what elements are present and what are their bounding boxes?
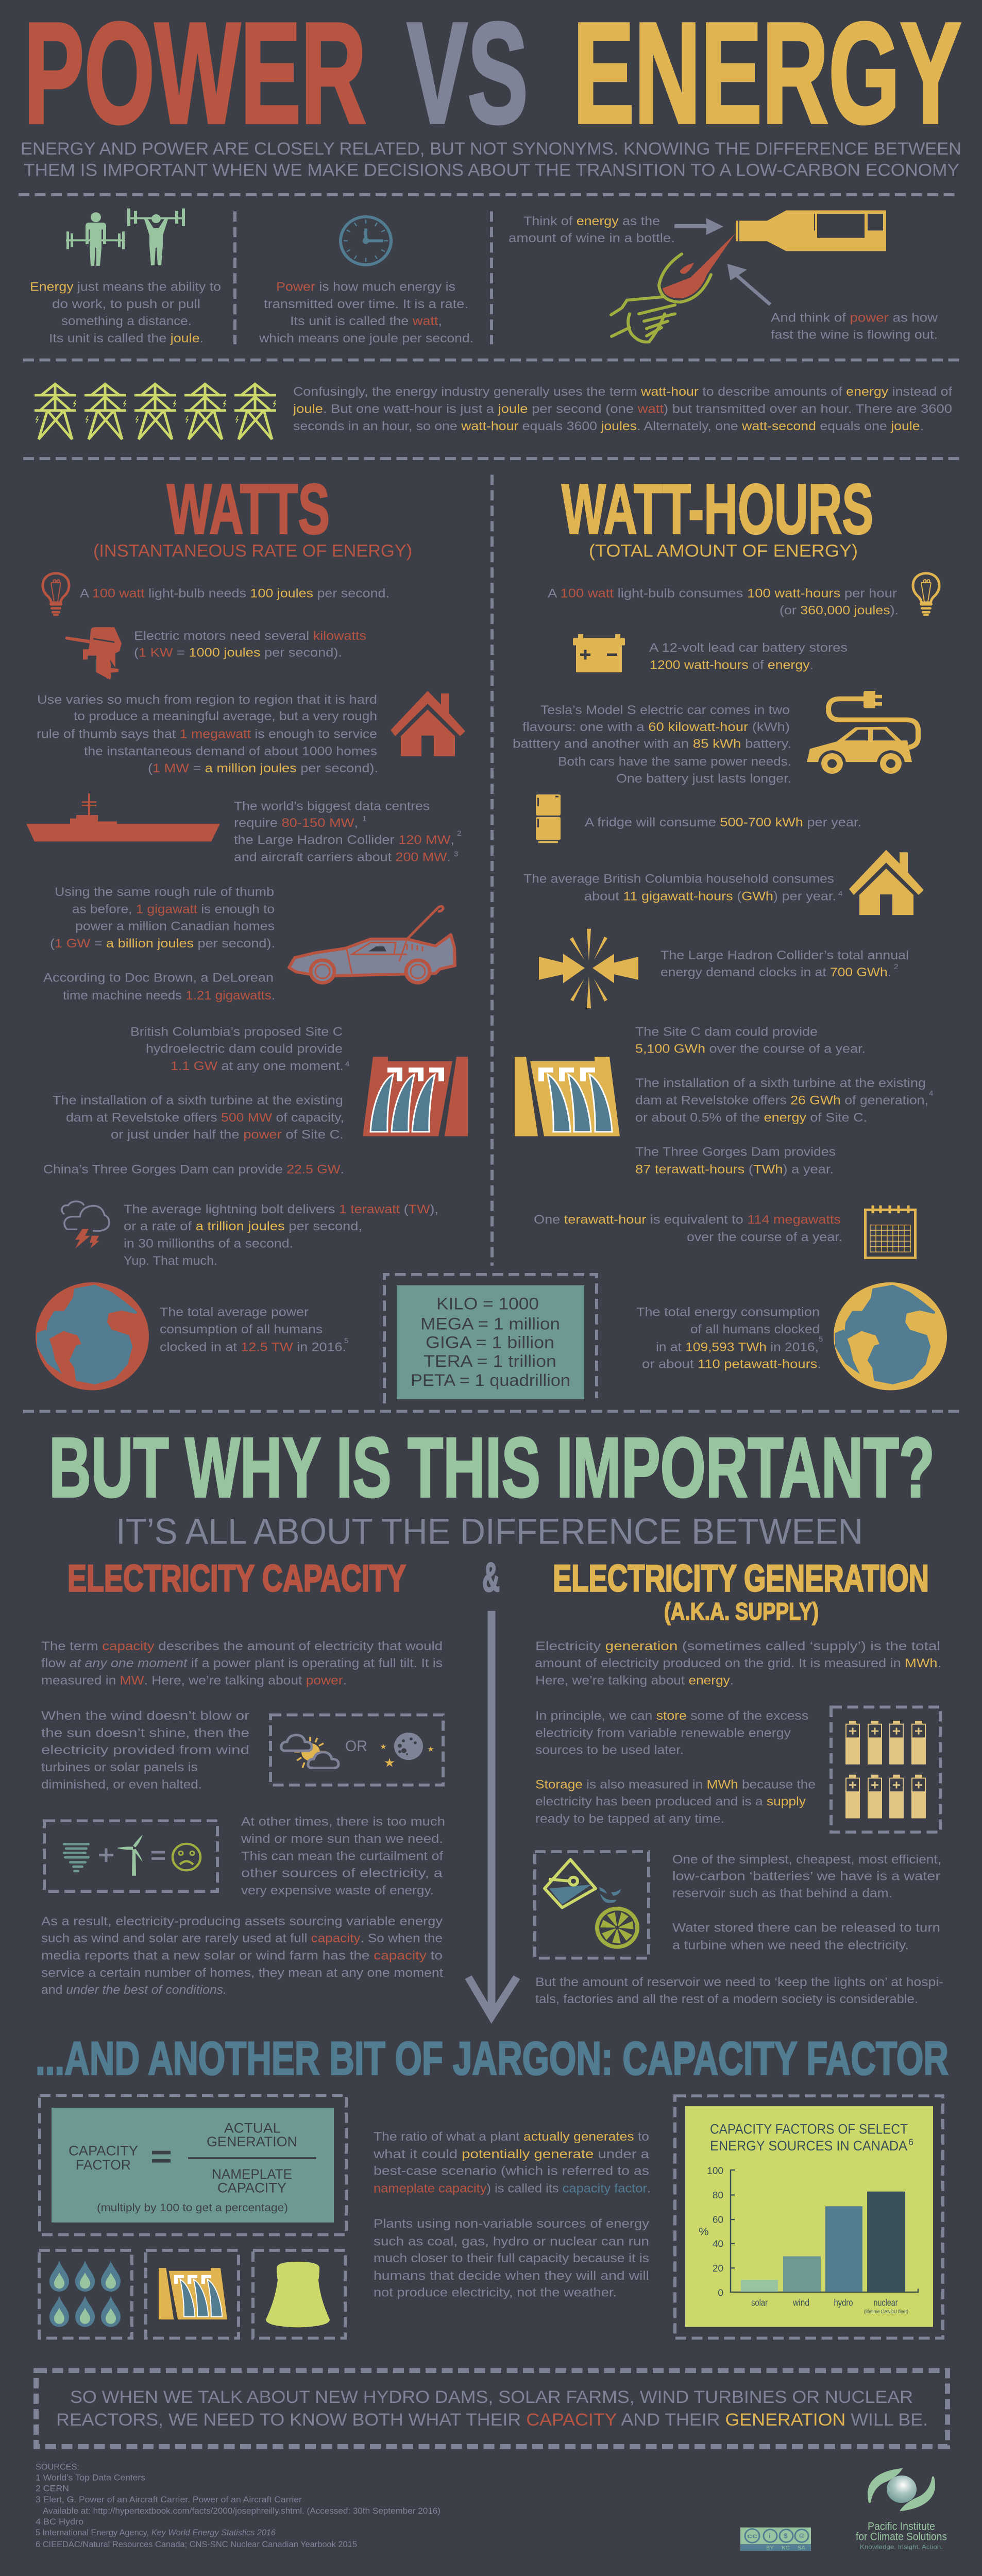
power text: Power is how much energy is [276,280,455,294]
site c text: 87 terawatt-hours (TWh) a year. [635,1163,834,1177]
power text [259,280,473,345]
icon panel: cloudy or night: OR [345,1738,367,1755]
lightning text: or a rate of a trillion joules per second, [124,1220,362,1233]
y axis unit: % [699,2226,709,2238]
human energy text: The total energy consumption [636,1306,820,1319]
collider text [661,948,909,979]
household consumption text: about 11 gigawatt-hours (GWh) per year. [584,890,836,903]
motor text: (1 KW = 1000 joules per second). [134,646,342,659]
variable energy text: media reports that a new solar or wind farm has the capacity to [41,1949,443,1962]
panel: capacity factor formula: NAMEPLATE [212,2166,292,2182]
capacity definition: measured in MW. Here, we’re talking about power. [41,1674,347,1687]
dam text: China’s Three Gorges Dam can provide 22.5 GW. [43,1163,344,1177]
human power text: clocked in at 12.5 TW in 2016. [160,1341,346,1354]
x axis labels: wind [792,2297,809,2308]
icon panel: batteries [831,1707,940,1832]
terawatt-hour text [534,1213,842,1244]
gigawatt text [43,886,275,1003]
icon: fridge [536,794,561,843]
capacity factor text: nameplate capacity) is called its capacity factor. [374,2182,651,2196]
energy text [30,280,221,345]
panel: conclusion: SO WHEN WE TALK ABOUT NEW HYDRO DAMS, SOLAR FARMS, WIND TURBINES OR NUCLEAR [70,2387,913,2407]
site c text: or about 0.5% of the energy of Site C. [635,1111,867,1125]
y axis labels [707,2165,723,2298]
wind and sun text: turbines or solar panels is [41,1761,198,1774]
bulb text: (or 360,000 joules ). [780,604,899,618]
panel: cooling tower [253,2250,345,2338]
panel: watt-hours [513,469,947,1390]
dam text: 4 [345,1060,349,1068]
arrow to bottle [674,218,723,235]
capacity factor text: humans that decide when they will and will [374,2269,649,2283]
storage text: sources to be used later. [535,1743,684,1757]
ampersand: & [482,1555,500,1600]
energy text: Energy just means the ability to [30,280,221,294]
y axis labels: 100 [707,2165,723,2176]
y axis labels: 40 [713,2239,723,2249]
reservoir text: a turbine when we need the electricity. [672,1939,909,1952]
icon: car battery [573,634,625,672]
logo text [856,2520,947,2551]
human energy text: in at 109,593 TWh in 2016, [656,1341,819,1354]
intro text: ENERGY AND POWER ARE CLOSELY RELATED, BUT NOT SYNONYMS. KNOWING THE DIFFERENCE BETWEEN [21,139,961,159]
icon: red bulb [43,573,69,616]
chart axes [731,2170,918,2292]
logo text: for Climate Solutions [856,2531,947,2543]
icon: wine bottle [736,210,886,251]
sources: 3 Elert, G. Power of an Aircraft Carrier. Power of an Aircraft Carrier [36,2495,302,2504]
wine text [509,214,938,342]
dam text: The installation of a sixth turbine at the existing [53,1094,343,1107]
variable energy text: As a result, electricity-producing assets sourcing variable energy [41,1914,443,1928]
creative commons badge: $ [784,2532,788,2540]
y axis labels: 80 [713,2190,723,2200]
x axis labels: (lifetime CANDU fleet) [864,2309,908,2315]
collider text: The Large Hadron Collider’s total annual [661,948,909,962]
data centres text [234,800,461,864]
household consumption text: 4 [838,890,842,898]
power text: transmitted over time. It is a rate. [264,297,468,311]
site c text: 5,100 GWh over the course of a year. [635,1042,866,1056]
variable energy text: such as wind and solar are rarely used at full capacity. So when the [41,1932,443,1945]
gigawatt text: time machine needs 1.21 gigawatts. [63,989,275,1003]
bulb text [548,587,899,618]
icon: red house [391,691,465,756]
icon: yellow earth [834,1282,947,1390]
sources: 2 CERN [36,2484,69,2493]
terawatt-hour text: One terawatt-hour is equivalent to 114 megawatts [534,1213,841,1227]
watt-hour explanation: Confusingly, the energy industry generally uses the term watt-hour to describe amounts of energy instead of [293,385,952,399]
creative commons badge: i [769,2532,771,2540]
panel: capacity factor formula: CAPACITY [69,2143,138,2158]
tesla text: flavours: one with a 60 kilowatt-hour (kWh) [522,721,790,734]
subheading: IT’S ALL ABOUT THE DIFFERENCE BETWEEN [116,1512,863,1552]
household text: the instantaneous demand of about 1000 homes [84,744,377,758]
panel: small dam [146,2250,239,2338]
data centres text: the Large Hadron Collider 120 MW , [234,834,454,847]
household text: (1 MW = a million joules per second). [148,762,378,775]
panel: generation [535,1639,943,2006]
panel: capacity factor formula: GENERATION [207,2134,297,2149]
x axis labels: solar [751,2297,768,2308]
title [24,0,961,153]
heading: electricity capacity: ELECTRICITY CAPACITY [67,1557,406,1599]
human power text: The total average power [160,1306,309,1319]
y axis labels: 20 [713,2263,723,2274]
reservoir text [535,1853,943,2006]
icon: weightlifters [66,209,185,266]
intro text: THEM IS IMPORTANT WHEN WE MAKE DECISIONS ABOUT THE TRANSITION TO A LOW-CARBON ECONOMY [24,160,959,180]
icon: wine glass and hand [611,233,735,342]
panel: watts [26,469,468,1390]
x axis labels: hydro [834,2297,853,2308]
data centres text: 1 [362,815,366,823]
generation definition: amount of electricity produced on the grid. It is measured in MWh. [535,1657,941,1670]
dam text: British Columbia’s proposed Site C [130,1025,343,1039]
dam text: or just under half the power of Site C. [111,1128,344,1142]
storage text: In principle, we can store some of the excess [535,1709,808,1723]
wind and sun text: the sun doesn’t shine, then the [41,1726,249,1740]
generation definition: Here, we’re talking about energy. [535,1674,734,1687]
data centres text: 3 [454,850,458,858]
icon: yellow house [849,850,924,915]
icon: clock [341,217,391,265]
watts heading: (INSTANTANEOUS RATE OF ENERGY) [93,541,412,561]
capacity factor text: Plants using non-variable sources of energy [374,2217,650,2231]
wind and sun text [41,1709,249,1791]
site c text: 4 [929,1090,933,1097]
reservoir text: But the amount of reservoir we need to ‘keep the lights on’ at hospi- [535,1975,943,1989]
panel: SI prefixes: MEGA = 1 million [420,1315,560,1333]
lightning text [124,1202,438,1268]
arrow: central down arrow [468,1611,517,2016]
capacity factor text: such as coal, gas, hydro or nuclear can run [374,2235,649,2248]
icon: red earth [36,1282,149,1390]
icon: outboard motor [65,627,122,680]
watt-hour explanation: joule. But one watt-hour is just a joule per second (one watt) but transmitted over an hour. There are 3600 [293,402,952,416]
site c text: The installation of a sixth turbine at the existing [635,1077,926,1090]
icon: transmission towers [35,384,276,439]
gigawatt text: Using the same rough rule of thumb [55,886,274,899]
gigawatt text: According to Doc Brown, a DeLorean [43,971,274,985]
wind and sun text: electricity provided from wind [41,1743,249,1757]
sources: 1 World’s Top Data Centers [36,2473,145,2482]
capacity factor text: best-case scenario (which is referred to as [374,2164,649,2178]
logo text: Knowledge. Insight. Action. [860,2544,943,2551]
dam text [43,1025,349,1177]
capacity factor text: much closer to their full capacity because it is [374,2251,649,2265]
lightning text: Yup. That much. [124,1254,217,1268]
storage text: electricity has been produced and is a supply [535,1795,806,1809]
sources [36,2462,441,2549]
panel: bar chart [675,2096,943,2338]
human energy text: of all humans clocked [690,1323,820,1336]
gigawatt text: (1 GW = a billion joules per second). [50,937,275,951]
reservoir text: Water stored there can be released to turn [672,1921,940,1935]
creative commons badge: NC [782,2545,790,2551]
site c text: The Three Gorges Dam provides [635,1145,836,1159]
logo text: Pacific Institute [868,2520,935,2532]
site c text: dam at Revelstoke offers 26 GWh of generation, [635,1094,928,1107]
watt-hour explanation: seconds in an hour, so one watt-hour equals 3600 joules. Alternately, one watt-second equals one joule. [293,419,924,433]
data centres text: and aircraft carriers about 200 MW . [234,851,451,864]
icon panel: cloudy or night [270,1715,443,1785]
panel: SI prefixes: PETA = 1 quadrillion [411,1371,570,1390]
variable energy text [41,1914,443,1997]
icon: yellow bulb [913,573,939,616]
panel: SI prefixes [384,1275,597,1403]
household consumption text [523,872,842,903]
icon: electric car [807,691,918,777]
chart title: 6 [908,2137,913,2147]
human power text: 5 [344,1337,348,1345]
data centres text: The world’s biggest data centres [234,800,430,813]
bulb text: A 100 watt light-bulb needs 100 joules per second. [80,587,390,600]
watt-hour explanation [293,385,952,433]
data centres text: 2 [457,829,461,838]
panel: SI prefixes: TERA = 1 trillion [424,1352,556,1371]
wind and sun text: diminished, or even halted. [41,1778,202,1791]
curtailment text: At other times, there is too much [241,1815,445,1829]
energy text: something a distance. [61,315,192,328]
motor text [134,630,366,659]
creative commons badge: cc [747,2532,758,2540]
capacity definition: flow at any one moment if a power plant is operating at full tilt. It is [41,1657,443,1670]
wine text: fast the wine is flowing out. [771,328,938,342]
icon: DeLorean [289,906,455,982]
icon: ship [26,793,220,841]
human energy text: or about 110 petawatt-hours . [642,1358,821,1371]
wine text: amount of wine in a bottle. [509,232,675,245]
household text: Use varies so much from region to region that it is hard [37,693,377,707]
chart title: CAPACITY FACTORS OF SELECT [710,2121,908,2137]
site c text [635,1025,933,1177]
fridge text: A fridge will consume 500-700 kWh per year. [585,816,861,829]
panel: capacity [41,1639,445,1997]
y axis labels: 60 [713,2214,723,2225]
panel: capacity factor formula: (multiply by 100 to get a percentage) [97,2201,288,2214]
variable energy text: and under the best of conditions. [41,1984,227,1997]
watt-hours heading [562,469,873,561]
icon panel: tornado plus turbine equals sad [44,1821,217,1891]
wine text: Think of energy as the [523,214,660,228]
tesla text: batttery and another with an 85 kWh battery. [513,737,791,751]
panel: capacity factor formula: FACTOR [76,2157,131,2173]
gigawatt text: power a million Canadian homes [75,920,275,933]
energy text: Its unit is called the joule. [49,332,204,345]
tesla text: One battery just lasts longer. [616,772,791,786]
tesla text: Tesla’s Model S electric car comes in two [540,703,790,717]
watt-hours heading: (TOTAL AMOUNT OF ENERGY) [589,541,858,561]
storage text [535,1709,816,1826]
curtailment text [241,1815,445,1897]
capacity factor text: what it could potentially generate under a [373,2148,650,2161]
panel: conclusion [36,2370,947,2447]
creative commons badge: BY [766,2545,774,2551]
x axis labels [751,2297,908,2315]
chart title: ENERGY SOURCES IN CANADA [710,2138,908,2154]
bulb text: A 100 watt light-bulb consumes 100 watt-hours per hour [548,587,897,600]
chart title [710,2121,913,2154]
lightning text: The average lightning bolt delivers 1 terawatt (TW), [124,1202,438,1216]
wind and sun text: When the wind doesn’t blow or [41,1709,249,1723]
curtailment text: wind or more sun than we need. [241,1833,443,1846]
reservoir text: One of the simplest, cheapest, most efficient, [672,1853,941,1867]
creative commons badge [740,2528,811,2551]
panel: SI prefixes: KILO = 1000 [436,1295,539,1313]
site c text: The Site C dam could provide [635,1025,818,1039]
tesla text: Both cars have the same power needs. [558,755,791,769]
curtailment text: other sources of electricity, a [241,1867,443,1880]
wine text: And think of power as how [771,311,938,325]
data centres text: require 80-150 MW , [234,816,358,830]
icon panel: bucket and turbine [535,1852,649,1958]
variable energy text: service a certain number of homes, they mean at any one moment [41,1966,443,1980]
household text: to produce a meaningful average, but a very rough [74,710,377,723]
human power text [160,1306,348,1354]
panel: capacity factor formula: ACTUAL [224,2120,281,2136]
collider text: energy demand clocks in at 700 GWh. [661,966,891,979]
x axis labels: nuclear [874,2297,898,2308]
creative commons badge: © [799,2532,804,2540]
human power text: consumption of all humans [160,1323,323,1336]
sources: SOURCES: [36,2462,79,2471]
reservoir text: tals, factories and all the rest of a modern society is considerable. [535,1993,918,2006]
generation definition [535,1639,941,1687]
sources: 4 BC Hydro [36,2517,83,2527]
panel: gas drops [39,2250,132,2338]
storage text: electricity from variable renewable energy [535,1726,791,1740]
bars [741,2192,905,2292]
sources: Available at: http://hypertextbook.com/facts/2000/josephreilly.shtml. (Accessed: 30th September 2016) [43,2506,441,2516]
human energy text: 5 [819,1336,823,1344]
generation definition: Electricity generation (sometimes called ‘supply’) is the total [535,1639,940,1653]
capacity definition: The term capacity describes the amount of electricity that would [41,1639,443,1653]
panel: capacity factor formula: CAPACITY [217,2180,286,2196]
power text: which means one joule per second. [259,332,473,345]
tesla text [513,703,791,786]
icon: particle collision [539,929,638,1008]
household text [37,693,378,775]
battery text: 1200 watt-hours of energy. [650,658,814,672]
logo: Pacific Institute [868,2468,935,2511]
icon: yellow dam [515,1057,620,1136]
intro text [21,139,961,180]
energy text: do work, to push or pull [52,297,200,311]
heading: electricity generation [553,1557,929,1625]
heading: electricity generation: (A.K.A. SUPPLY) [664,1598,819,1625]
reservoir text: reservoir such as that behind a dam. [672,1887,892,1901]
capacity factor text: The ratio of what a plant actually generates to [374,2130,649,2144]
dam text: hydroelectric dam could provide [146,1042,343,1056]
human energy text [636,1306,823,1371]
arrow to wine flow [730,266,770,304]
motor text: Electric motors need several kilowatts [134,630,366,643]
gigawatt text: as before, 1 gigawatt is enough to [72,903,275,916]
icon: storm cloud [62,1201,109,1248]
collider text: 2 [894,963,898,971]
capacity factor text: not produce electricity, not the weather. [374,2286,617,2299]
sources: 6 CIEEDAC/Natural Resources Canada; CNS-SNC Nuclear Canadian Yearbook 2015 [36,2539,357,2549]
household consumption text: The average British Columbia household consumes [523,872,834,886]
panel: conclusion: REACTORS, WE NEED TO KNOW BOTH WHAT THEIR CAPACITY AND THEIR GENERATION WILL BE. [56,2410,928,2430]
panel: capacity factor formula [40,2095,346,2235]
terawatt-hour text: over the course of a year. [687,1231,842,1244]
storage text: Storage is also measured in MWh because the [535,1778,816,1791]
capacity factor text [373,2130,651,2299]
sources: 5 International Energy Agency, Key World Energy Statistics 2016 [36,2528,276,2537]
curtailment text: This can mean the curtailment of [241,1850,443,1863]
household text: rule of thumb says that 1 megawatt is enough to service [37,727,377,741]
icon: red dam [363,1057,468,1136]
storage text: ready to be tapped at any time. [535,1812,724,1826]
panel: SI prefixes: GIGA = 1 billion [426,1333,554,1352]
creative commons badge: SA [798,2545,806,2551]
icon: calendar [866,1206,915,1258]
watts heading: WATTS [167,469,330,549]
y axis labels: 0 [718,2287,723,2298]
lightning text: in 30 millionths of a second. [124,1237,293,1250]
battery text: A 12-volt lead car battery stores [649,641,848,655]
capacity definition [41,1639,443,1687]
reservoir text: low-carbon ‘batteries’ we have is a water [672,1870,940,1883]
watts heading [93,469,412,561]
dam text: 1.1 GW at any one moment. [171,1059,344,1073]
power text: Its unit is called the watt, [290,315,442,328]
battery text [649,641,848,672]
dam text: dam at Revelstoke offers 500 MW of capacity, [66,1111,344,1125]
curtailment text: very expensive waste of energy. [241,1884,434,1897]
